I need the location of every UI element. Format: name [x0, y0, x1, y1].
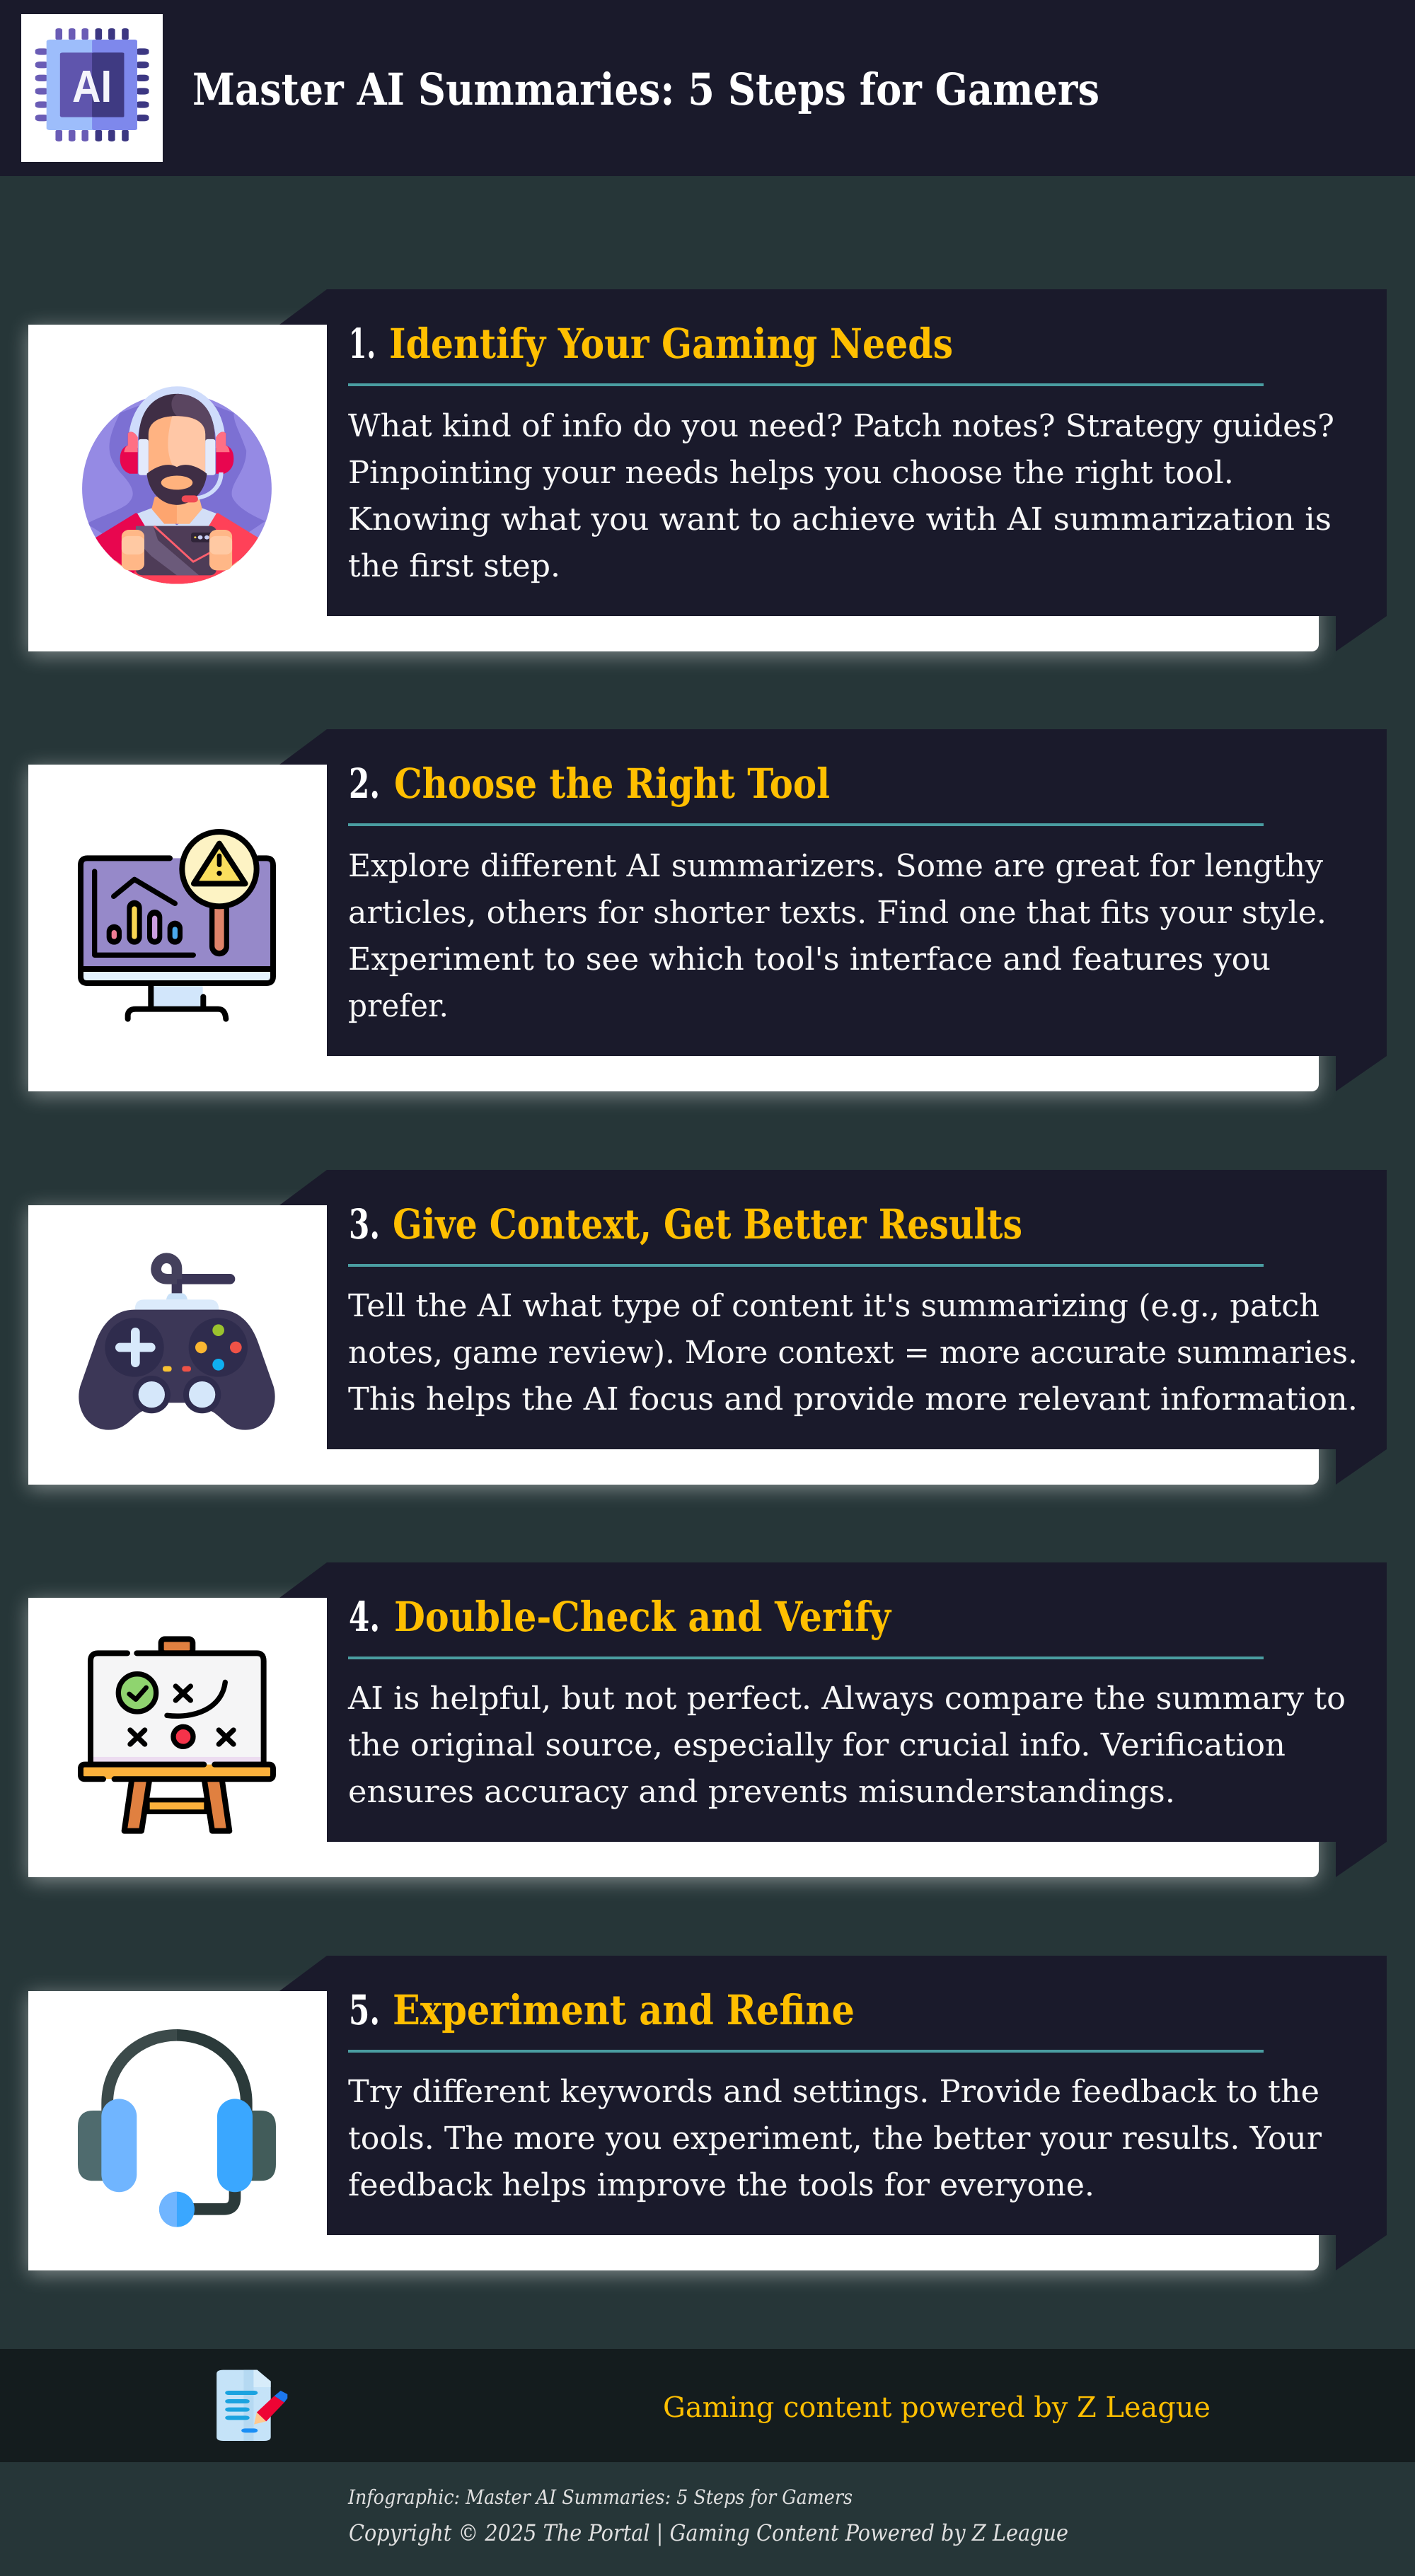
icon: strategy board on easel [81, 1639, 273, 1831]
body text: feedback helps improve the tools for everyone. [348, 2167, 1095, 2203]
panel: step 5 [16, 1956, 1387, 2286]
heading: Identify Your Gaming Needs [389, 320, 953, 368]
body text: AI is helpful, but not perfect. Always compare the summary to [347, 1681, 1346, 1717]
panel: step 3 [16, 1170, 1387, 1501]
body text: This helps the AI focus and provide more relevant information. [348, 1381, 1358, 1417]
text ribbon 2 [279, 729, 1387, 1091]
heading: Choose the Right Tool [394, 760, 830, 808]
body text [348, 848, 1327, 1024]
text ribbon 1 [279, 289, 1387, 651]
panel: step 2 [16, 729, 1387, 1108]
heading: 2. [349, 760, 380, 808]
body text: What kind of info do you need? Patch notes? Strategy guides? [348, 408, 1334, 444]
image panel 2 [28, 765, 1319, 1091]
heading: 4. [349, 1593, 380, 1641]
footer band [0, 2349, 1415, 2462]
image panel 1 [28, 325, 1319, 651]
logo: AI chip: AI [72, 61, 112, 112]
body text: Try different keywords and settings. Provide feedback to the [348, 2074, 1319, 2110]
body text: Knowing what you want to achieve with AI summarization is [348, 501, 1332, 538]
body text [348, 1288, 1358, 1417]
body text: articles, others for shorter texts. Find one that fits your style. [348, 895, 1327, 931]
heading: 3. [349, 1200, 380, 1248]
body text: notes, game review). More context = more accurate summaries. [348, 1335, 1358, 1371]
heading: 5. [349, 1986, 380, 2034]
heading: Give Context, Get Better Results [393, 1200, 1022, 1248]
body text [348, 2074, 1322, 2203]
copyright block: Copyright © 2025 The Portal | Gaming Content Powered by Z League [349, 2519, 1068, 2546]
body text: the first step. [348, 548, 560, 584]
heading: Double-Check and Verify [394, 1593, 892, 1641]
heading: 1. [349, 320, 376, 368]
body text: Tell the AI what type of content it's summarizing (e.g., patch [348, 1288, 1319, 1324]
image panel 3 [28, 1205, 1319, 1485]
heading: Experiment and Refine [393, 1986, 855, 2034]
title: Master AI Summaries: 5 Steps for Gamers [192, 64, 1099, 115]
text ribbon 4 [279, 1562, 1387, 1877]
icon: gamer with headset [76, 390, 278, 586]
body text: Explore different AI summarizers. Some are great for lengthy [348, 848, 1323, 884]
body text: the original source, especially for crucial info. Verification [348, 1727, 1286, 1763]
header bar [0, 0, 1415, 176]
logo: AI chip [21, 14, 163, 162]
body text: ensures accuracy and prevents misunderstandings. [348, 1774, 1175, 1810]
body text: Pinpointing your needs helps you choose the right tool. [348, 455, 1234, 491]
image panel 4 [28, 1598, 1319, 1877]
image panel 5 [28, 1991, 1319, 2270]
body text [347, 1681, 1346, 1810]
icon: monitor with warning magnifier [81, 832, 273, 1019]
text ribbon 3 [279, 1170, 1387, 1485]
body text: prefer. [348, 988, 449, 1024]
body text: Experiment to see which tool's interface and features you [348, 941, 1271, 977]
panel: step 1 [16, 289, 1387, 668]
copyright block: Infographic: Master AI Summaries: 5 Steps for Gamers [347, 2485, 853, 2509]
panel: step 4 [16, 1562, 1387, 1893]
icon: headset [78, 2035, 276, 2227]
body text: tools. The more you experiment, the better your results. Your [348, 2120, 1322, 2157]
footer credit: Gaming content powered by Z League [663, 2391, 1211, 2424]
text ribbon 5 [279, 1956, 1387, 2270]
body text [348, 408, 1334, 584]
icon: document and pencil [216, 2370, 287, 2441]
icon: game controller [79, 1258, 275, 1430]
copyright block [347, 2485, 1068, 2546]
